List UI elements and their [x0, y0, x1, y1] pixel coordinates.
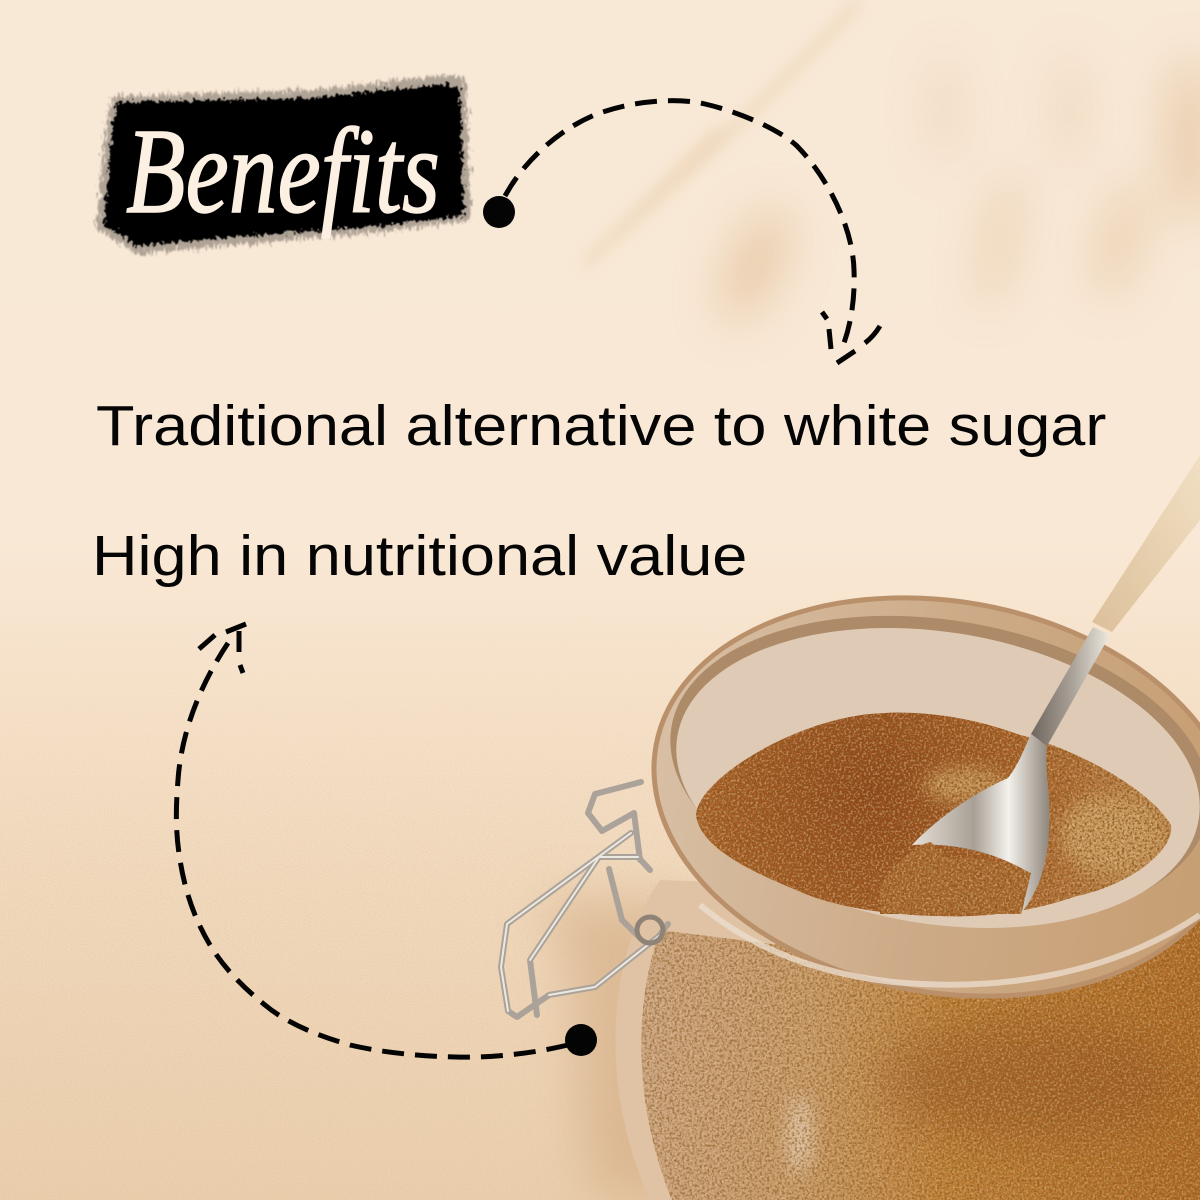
- linen texture: [0, 716, 694, 1200]
- spoon bowl: [912, 734, 1050, 912]
- jar rim: [619, 551, 1200, 1043]
- spoon stem: [1031, 627, 1110, 746]
- heading: Benefits brush label: [92, 72, 474, 257]
- sugar surface: [696, 712, 1172, 916]
- sugar mound over spoon: [878, 840, 1034, 916]
- metal clasp: [501, 782, 668, 1017]
- blurred plant shadows: [585, 0, 1200, 331]
- brush stroke feathered edge: [96, 75, 471, 254]
- cloth shading: [540, 900, 700, 1200]
- spoon handle: [1092, 455, 1200, 632]
- text: second benefit: High in nutritional value: [92, 524, 747, 588]
- jar body: [615, 880, 1200, 1200]
- brush stroke background: [104, 84, 464, 246]
- text: first benefit: Traditional alternative to white sugar: [96, 394, 1106, 458]
